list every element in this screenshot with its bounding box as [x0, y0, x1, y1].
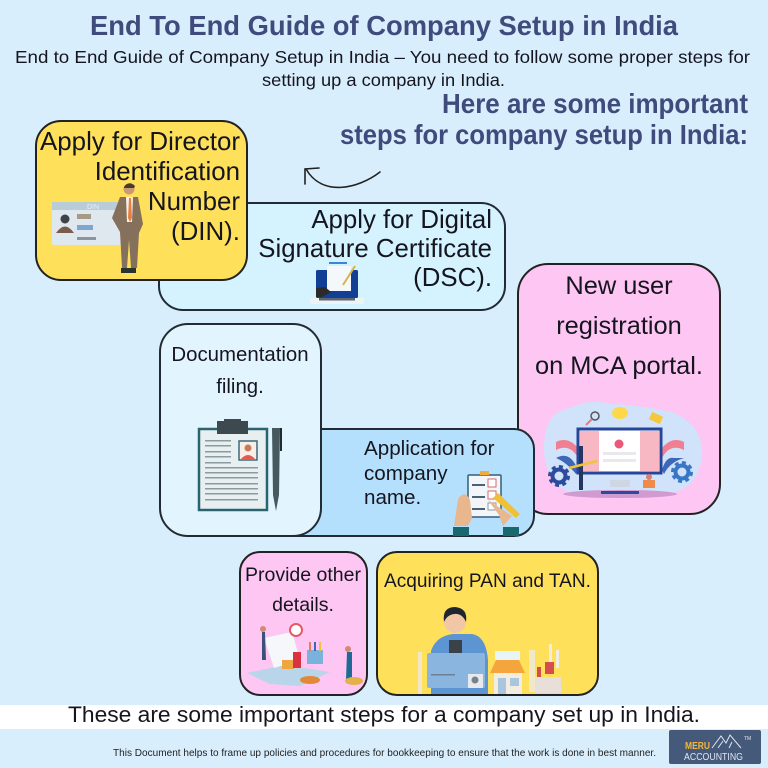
intro text: setting up a company in India. — [262, 70, 505, 90]
step text: MCA: on MCA portal. — [535, 352, 703, 380]
panel: PAN and TAN — [377, 552, 598, 695]
step text: PAN and TAN: Acquiring PAN and TAN. — [384, 570, 591, 592]
intro text — [15, 47, 750, 90]
icon: businessman — [112, 183, 143, 273]
logo: MERU — [685, 740, 710, 752]
step text: DIN: Identification — [95, 158, 240, 186]
icon: man with PAN card and shop — [418, 607, 561, 694]
step text: MCA — [535, 272, 703, 380]
step text: other details: details. — [272, 594, 334, 616]
panel: application for company name — [225, 429, 534, 536]
panel: director identification number — [36, 121, 247, 280]
icon: registration screen — [544, 402, 702, 498]
title: End To End Guide of Company Setup in India — [90, 10, 678, 41]
step text: documentation: Documentation — [171, 344, 309, 366]
step text: DIN: Number — [148, 188, 240, 216]
icon: team with documents — [247, 624, 363, 686]
step text: MCA: New user — [565, 272, 673, 300]
logo — [669, 730, 761, 764]
icon: clipboard and pen — [199, 419, 282, 511]
step text: other details: Provide other — [245, 564, 361, 586]
icon: DIN card: DIN — [87, 204, 99, 211]
step text: documentation: filing. — [216, 376, 264, 398]
step text: company name: name. — [364, 486, 421, 509]
arrow — [305, 168, 380, 187]
panel: other details — [240, 552, 367, 695]
logo: ACCOUNTING — [684, 751, 743, 763]
icon: laptop with document — [310, 262, 364, 304]
subheading: Here are some important — [442, 88, 748, 119]
step text: company name — [364, 437, 495, 509]
step text: other details — [245, 564, 361, 616]
step text: company name: Application for — [364, 437, 495, 460]
step text: DSC — [258, 206, 492, 292]
panel: digital signature certificate — [159, 203, 505, 310]
footer note: This Document helps to frame up policies and procedures for bookkeeping to ensure that the work is done in best manner. — [113, 747, 656, 759]
step text: DIN: Apply for Director — [40, 128, 240, 156]
subheading — [340, 88, 748, 150]
step text: company name: company — [364, 462, 448, 485]
icon: DIN card — [52, 202, 122, 245]
step text: DSC: Signature Certificate — [258, 235, 492, 263]
panel: documentation filing — [160, 324, 321, 536]
step text: DIN — [40, 128, 240, 246]
step text: documentation — [171, 344, 309, 398]
panel: new user registration — [518, 264, 720, 514]
step text: DSC: Apply for Digital — [311, 206, 492, 234]
footer statement band: These are some important steps for a company set up in India. — [68, 702, 700, 727]
logo: TM — [744, 736, 751, 742]
icon: checklist with hands — [453, 471, 520, 536]
intro text: End to End Guide of Company Setup in India – You need to follow some proper steps for — [15, 47, 750, 67]
step text: DSC: (DSC). — [413, 264, 492, 292]
step text: MCA: registration — [556, 312, 682, 340]
step text: DIN: (DIN). — [171, 218, 240, 246]
